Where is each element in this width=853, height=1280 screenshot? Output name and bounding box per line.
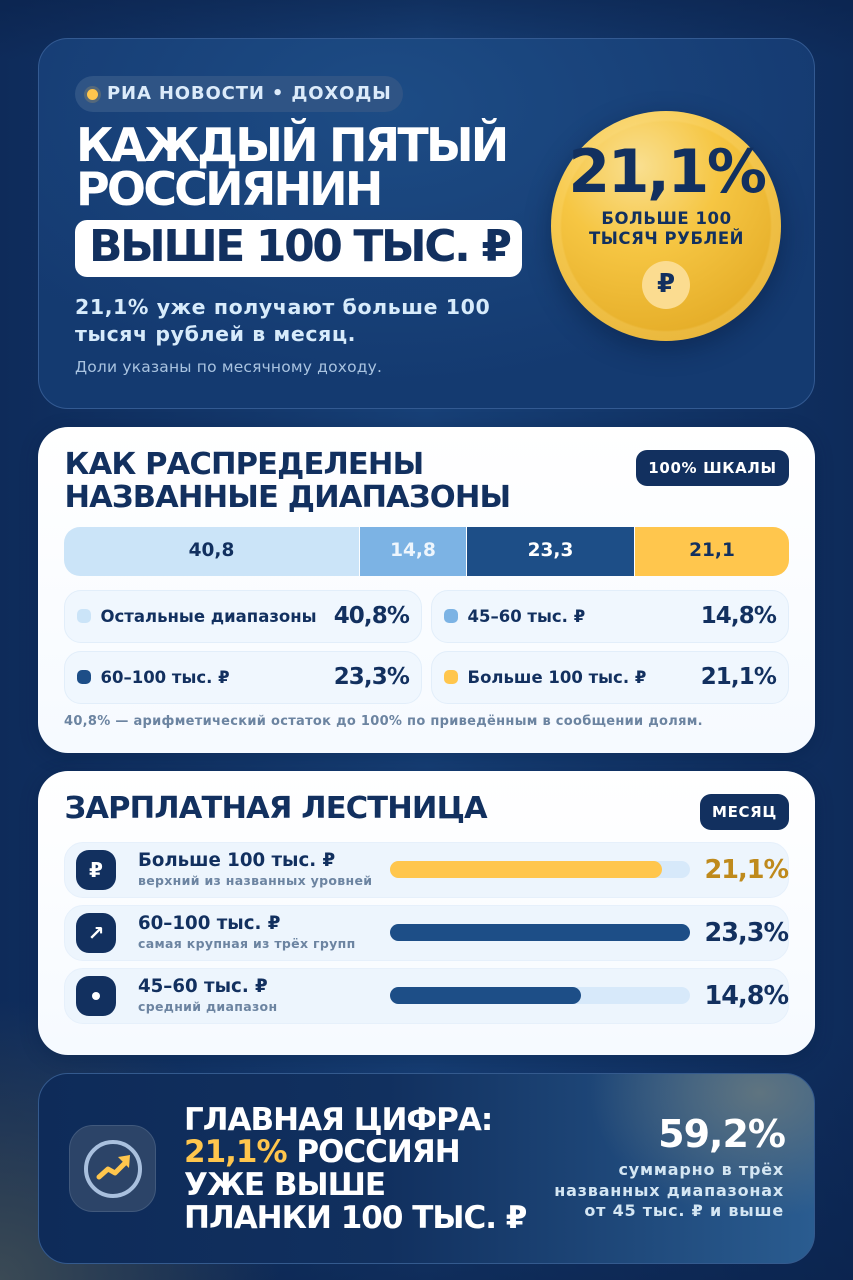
heading bbox=[64, 447, 510, 515]
legend: 60-100: 23,3% bbox=[334, 664, 409, 690]
label: Больше 100 тыс. ₽ bbox=[138, 850, 335, 871]
badge bbox=[700, 794, 789, 830]
icon: arrow bbox=[76, 913, 116, 953]
bar bbox=[390, 987, 690, 1004]
segment 14.8 bbox=[360, 527, 466, 576]
coin label bbox=[589, 209, 744, 248]
bar bbox=[390, 861, 690, 878]
headline bbox=[184, 1102, 526, 1236]
footnote: 40,8% — арифметический остаток до 100% по приведённым в сообщении долям. bbox=[64, 714, 703, 729]
legend: other: Остальные диапазоны bbox=[100, 607, 317, 626]
segment 23.3: 23,3 bbox=[528, 540, 573, 561]
row: 45-60 bbox=[64, 968, 789, 1024]
value: 21,1% bbox=[705, 855, 788, 885]
segment 21.1 bbox=[635, 527, 789, 576]
key value caption: суммарно в трёх bbox=[618, 1160, 784, 1179]
headline: УЖЕ ВЫШЕ bbox=[184, 1167, 385, 1203]
chip dot bbox=[87, 89, 98, 100]
subtitle: 21,1% уже получают больше 100 bbox=[75, 295, 490, 319]
panel: salary ladder bbox=[38, 771, 815, 1055]
sublabel: самая крупная из трёх групп bbox=[138, 936, 356, 951]
icon: ruble: ₽ bbox=[89, 858, 103, 882]
coin label: БОЛЬШЕ 100 bbox=[601, 209, 732, 228]
subtitle bbox=[75, 295, 490, 346]
legend: 45-60: 14,8% bbox=[701, 603, 776, 629]
legend: 45-60 bbox=[431, 590, 789, 643]
segment 21.1: 21,1 bbox=[689, 540, 735, 561]
headline bbox=[76, 118, 507, 216]
segment 40.8: 40,8 bbox=[189, 540, 234, 561]
legend: 60-100: 60–100 тыс. ₽ bbox=[100, 668, 230, 687]
heading: ЗАРПЛАТНАЯ ЛЕСТНИЦА bbox=[64, 791, 487, 826]
label: 60–100 тыс. ₽ bbox=[138, 913, 280, 934]
legend: 100+: Больше 100 тыс. ₽ bbox=[468, 668, 646, 687]
heading: НАЗВАННЫЕ ДИАПАЗОНЫ bbox=[64, 480, 510, 515]
panel: key number bbox=[38, 1073, 815, 1264]
heading: КАК РАСПРЕДЕЛЕНЫ bbox=[64, 447, 423, 482]
coin value: 21,1% bbox=[568, 137, 765, 207]
note: Доли указаны по месячному доходу. bbox=[75, 358, 382, 376]
legend: 45-60: 45–60 тыс. ₽ bbox=[468, 607, 585, 626]
legend: other bbox=[64, 590, 422, 643]
bar bbox=[390, 924, 690, 941]
value: 23,3% bbox=[705, 918, 788, 948]
legend: 100+: 21,1% bbox=[701, 664, 776, 690]
segment 40.8 bbox=[64, 527, 359, 576]
sublabel: верхний из названных уровней bbox=[138, 873, 372, 888]
headline: РОССИЯНИН bbox=[76, 162, 381, 216]
legend: 60-100 bbox=[64, 651, 422, 704]
icon: arrow: ↗ bbox=[88, 921, 104, 945]
sublabel: средний диапазон bbox=[138, 999, 277, 1014]
icon: dot bbox=[76, 976, 116, 1016]
key value: 59,2% bbox=[658, 1112, 785, 1156]
panel: hero bbox=[38, 38, 815, 409]
badge: МЕСЯЦ bbox=[712, 803, 777, 821]
row: 60-100 bbox=[64, 905, 789, 961]
stacked bar bbox=[64, 527, 789, 576]
key value caption: от 45 тыс. ₽ и выше bbox=[584, 1201, 784, 1220]
headline: 21,1% РОССИЯН bbox=[184, 1134, 460, 1170]
icon: ruble bbox=[642, 261, 690, 309]
panel: distribution bbox=[38, 427, 815, 753]
label: 45–60 тыс. ₽ bbox=[138, 976, 268, 997]
badge: 100% ШКАЛЫ bbox=[648, 459, 777, 477]
headline: ГЛАВНАЯ ЦИФРА: bbox=[184, 1102, 492, 1138]
chip text: РИА НОВОСТИ • ДОХОДЫ bbox=[107, 83, 392, 104]
headline: ПЛАНКИ 100 ТЫС. ₽ bbox=[184, 1200, 526, 1236]
badge bbox=[636, 450, 789, 486]
icon: growth chart bbox=[69, 1125, 156, 1212]
key value caption: названных диапазонах bbox=[554, 1180, 784, 1200]
subtitle: тысяч рублей в месяц. bbox=[75, 322, 356, 346]
headline highlight: ВЫШЕ 100 ТЫС. ₽ bbox=[89, 221, 510, 272]
icon: ruble bbox=[76, 850, 116, 890]
row: 100+ bbox=[64, 842, 789, 898]
headline: КАЖДЫЙ ПЯТЫЙ bbox=[76, 118, 507, 172]
source chip bbox=[75, 76, 403, 112]
legend: 100+ bbox=[431, 651, 789, 704]
icon: ruble: ₽ bbox=[657, 269, 675, 299]
gold coin bbox=[551, 111, 781, 341]
segment 14.8: 14,8 bbox=[390, 540, 436, 561]
segment 23.3 bbox=[467, 527, 634, 576]
value: 14,8% bbox=[705, 981, 788, 1011]
coin label: ТЫСЯЧ РУБЛЕЙ bbox=[589, 229, 744, 248]
key value caption bbox=[554, 1160, 784, 1220]
legend: other: 40,8% bbox=[334, 603, 409, 629]
